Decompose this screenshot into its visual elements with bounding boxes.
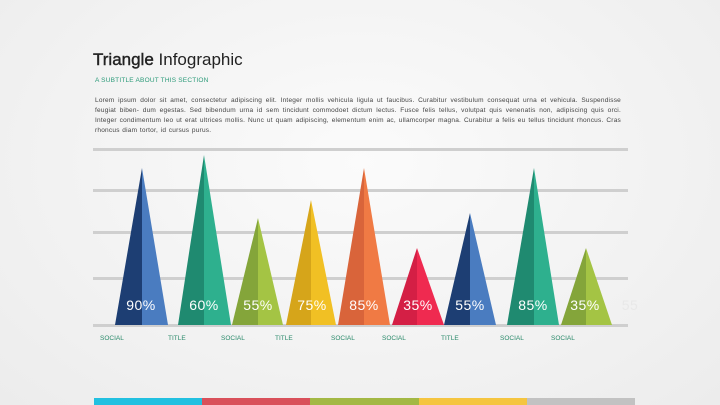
triangle 4 75% bbox=[286, 200, 336, 325]
category labels: TITLE bbox=[275, 335, 293, 342]
percent labels bbox=[126, 297, 638, 313]
percent labels: 55% bbox=[455, 297, 485, 313]
category labels: SOCIAL bbox=[382, 335, 406, 342]
category labels bbox=[100, 335, 575, 342]
percent labels: 35% bbox=[403, 297, 433, 313]
triangle 2 60% bbox=[178, 155, 231, 325]
body text: Lorem ipsum dolor sit amet, consectetur adipiscing elit. Integer mollis vehicula ligula ut faucibus. Curabitur vestibulum consequat urna et vehicula. Suspendisse feugiat biben- dum egestas. Sed bibendum urna id sem tincidunt commodoet dictum lectus. Fusce felis tellus, volutpat quis venenatis non, adipiscing quis orci. Integer condimentum leo ut erat ultrices mollis. Nunc ut quam adipiscing, elementum enim ac, ullamcorper magna. Curabitur a felis eu tellus tincidunt rhoncus. Cras rhoncus diam tortor, id cursus purus. bbox=[95, 97, 621, 134]
category labels: SOCIAL bbox=[331, 335, 355, 342]
category labels: SOCIAL bbox=[221, 335, 245, 342]
percent labels: 90% bbox=[126, 297, 156, 313]
percent labels: 85% bbox=[349, 297, 379, 313]
percent labels: 55% bbox=[243, 297, 273, 313]
percent labels: 75% bbox=[297, 297, 327, 313]
subtitle: A SUBTITLE ABOUT THIS SECTION bbox=[95, 77, 209, 84]
category labels: TITLE bbox=[168, 335, 186, 342]
triangle 1 90% bbox=[115, 168, 168, 325]
percent labels: 85% bbox=[518, 297, 548, 313]
category labels: SOCIAL bbox=[500, 335, 524, 342]
category labels: SOCIAL bbox=[551, 335, 575, 342]
triangle 6 35% bbox=[392, 248, 444, 325]
percent labels: 60% bbox=[189, 297, 219, 313]
category labels: TITLE bbox=[441, 335, 459, 342]
percent labels: 35% bbox=[570, 297, 600, 313]
percent labels: 55 bbox=[622, 297, 638, 313]
triangle 5 85% bbox=[338, 168, 390, 325]
triangle 9 35% bbox=[561, 248, 612, 325]
category labels: SOCIAL bbox=[100, 335, 124, 342]
triangle 3 55% bbox=[232, 218, 283, 325]
bottom color bars bbox=[94, 398, 635, 405]
triangle 7 55% bbox=[444, 213, 496, 325]
triangle 8 85% bbox=[507, 168, 559, 325]
title: Triangle Infographic bbox=[93, 50, 243, 69]
